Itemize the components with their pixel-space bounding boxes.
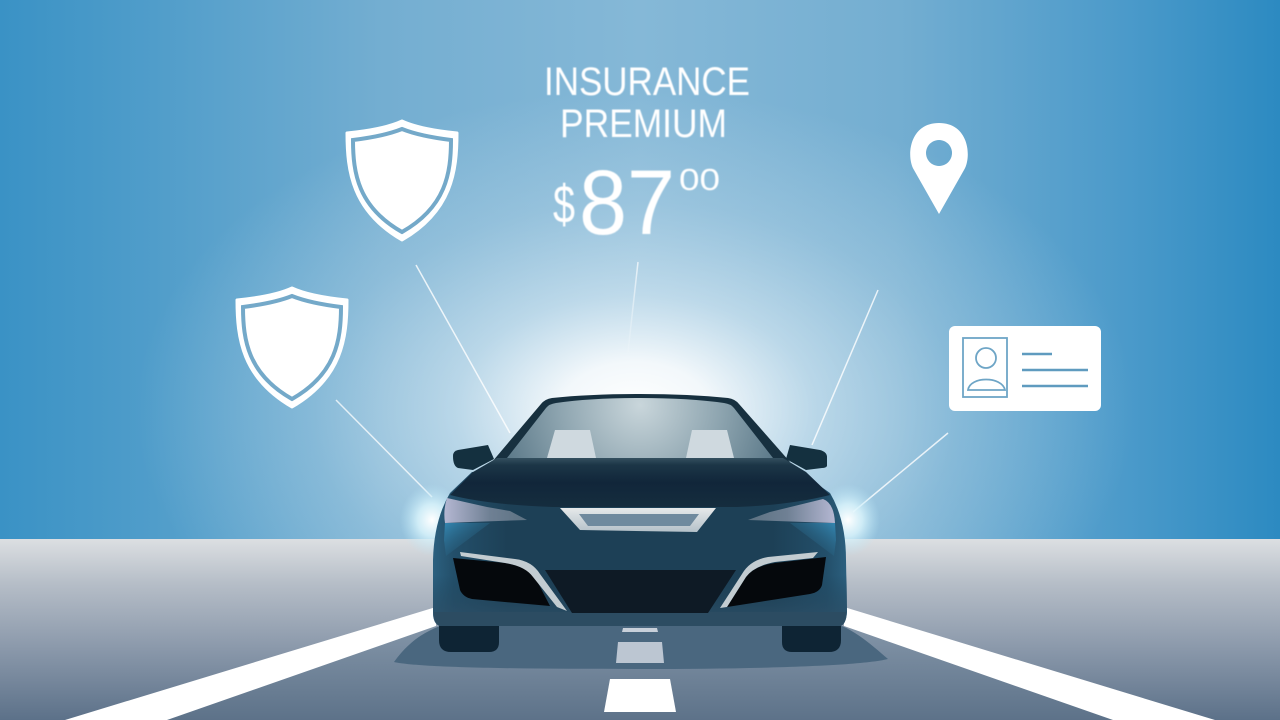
wheel left [439, 620, 499, 652]
headlight glow right [816, 484, 880, 556]
vent left [453, 558, 550, 606]
center lower grille [545, 570, 736, 613]
road surface [167, 626, 1113, 720]
vent right [727, 557, 826, 607]
hood [450, 458, 830, 507]
price: 87 [579, 152, 675, 254]
seat right [686, 430, 734, 458]
sky background [0, 0, 1280, 540]
wheel right [782, 620, 841, 652]
seat left [547, 430, 596, 458]
road edge line left [65, 607, 436, 720]
trim right [720, 552, 818, 608]
headlight left [444, 498, 527, 523]
icon: shield lower [237, 288, 347, 407]
connector lines [336, 262, 948, 512]
roof and pillars [492, 394, 790, 462]
mirror right [786, 445, 827, 470]
icon: id card [949, 326, 1101, 411]
title [544, 60, 750, 146]
road dashes [604, 628, 676, 712]
icon: shield upper [347, 121, 457, 240]
ground [0, 539, 1280, 720]
road edge line right [844, 607, 1215, 720]
side highlight left [444, 523, 490, 556]
title: INSURANCE [544, 60, 750, 104]
lower body tint [433, 575, 847, 626]
headlight glow left [400, 484, 464, 556]
trim left [460, 552, 567, 611]
car shadow [394, 626, 888, 669]
title: PREMIUM [560, 102, 727, 146]
icon: location pin [910, 123, 968, 214]
price: $ [553, 175, 575, 235]
side highlight right [790, 523, 836, 556]
price: 00 [679, 162, 720, 197]
windshield [507, 398, 773, 458]
lower bumper band [434, 612, 846, 626]
car body [433, 472, 847, 626]
mirror left [453, 445, 494, 470]
headlight right [748, 499, 835, 523]
car [433, 394, 847, 652]
front badge grille [560, 508, 716, 532]
price [553, 152, 720, 254]
